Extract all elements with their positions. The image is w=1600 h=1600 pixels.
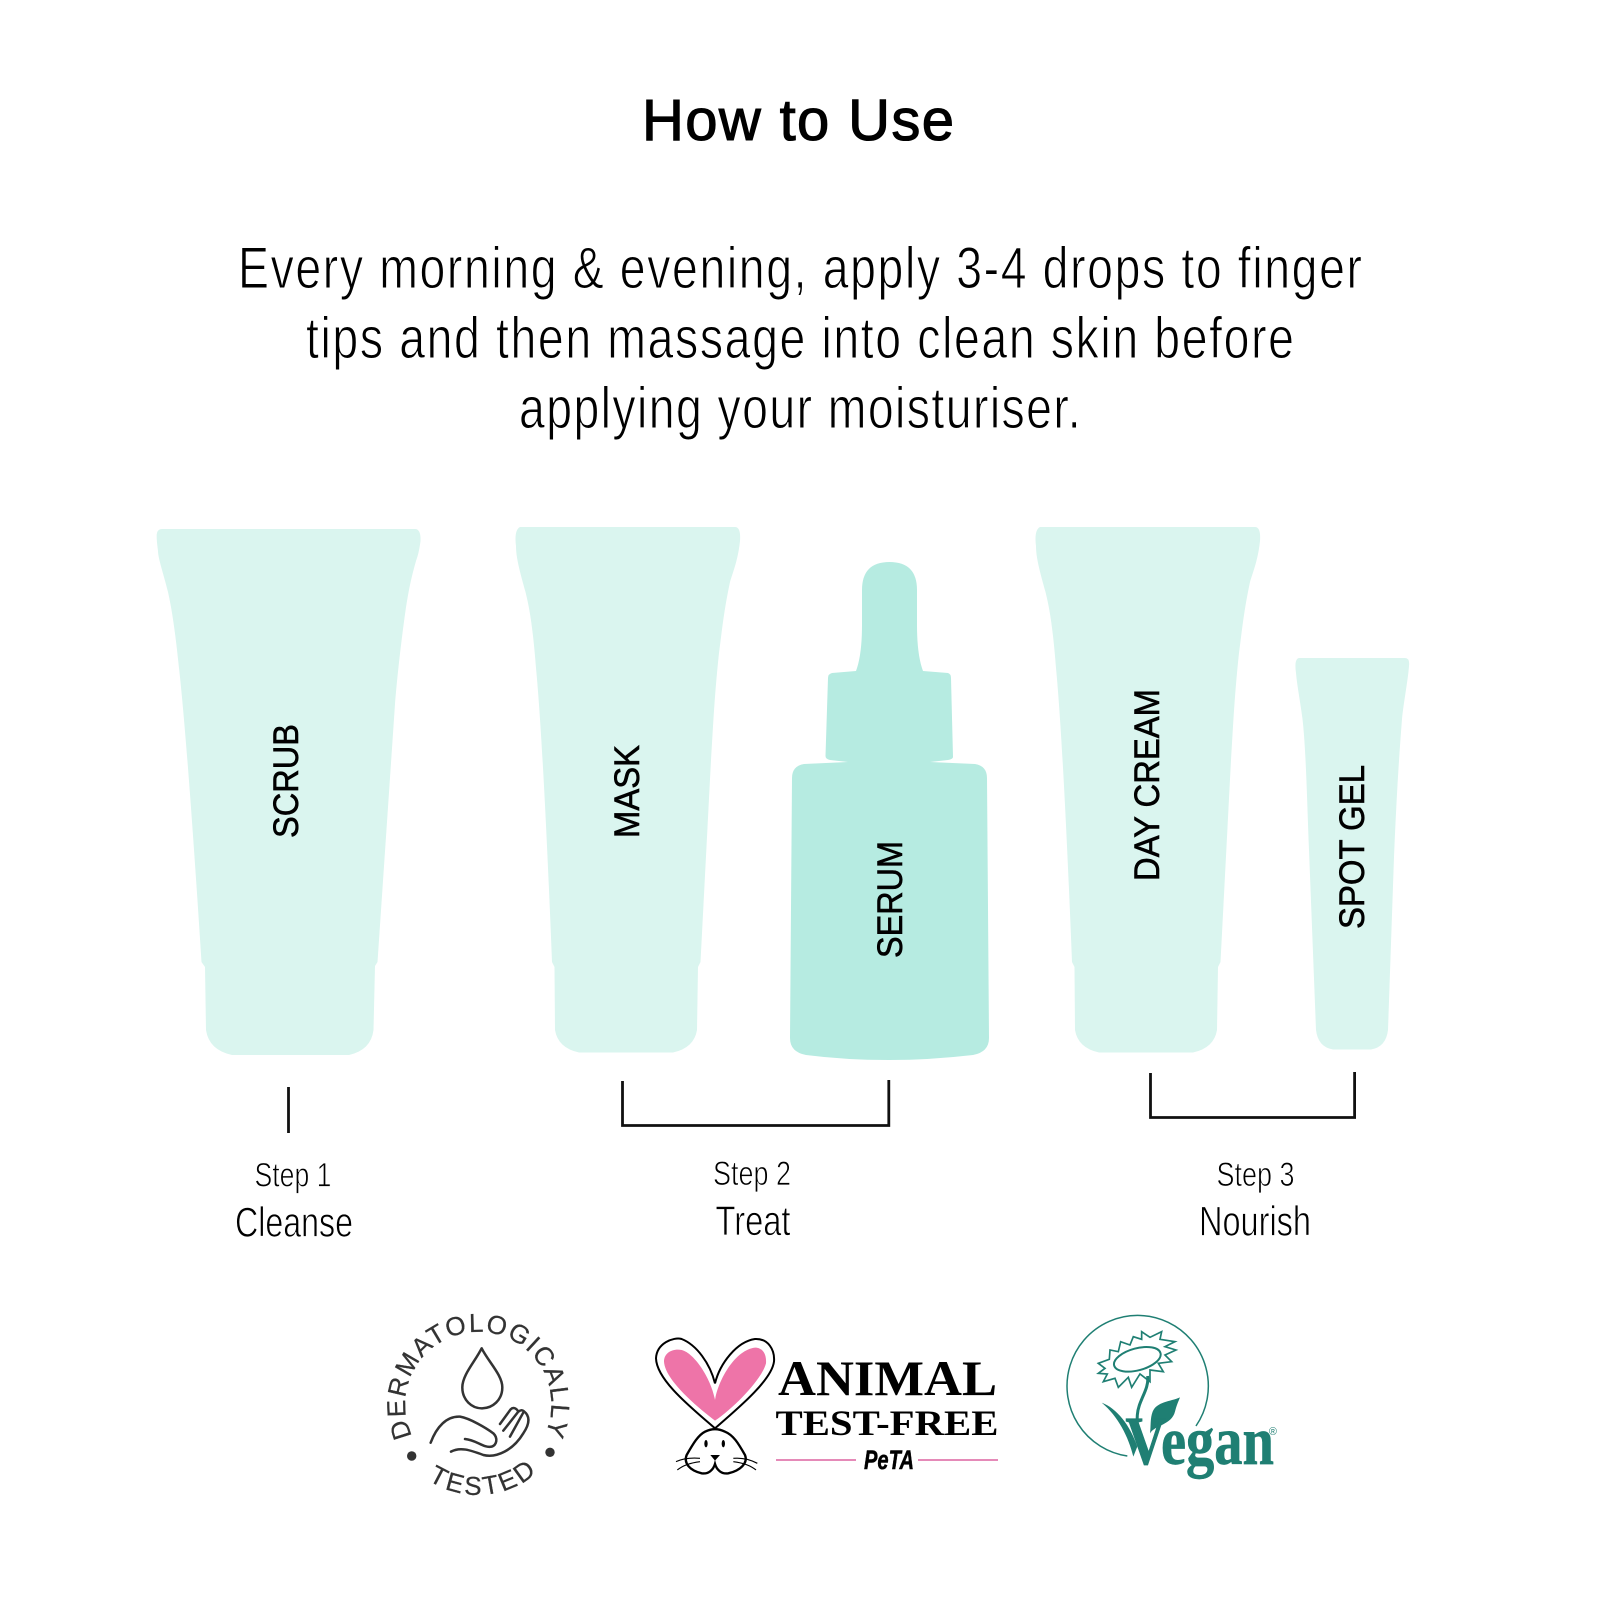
label: scrub: SCRUB: [267, 724, 306, 838]
product: day cream tube: [1036, 527, 1260, 1052]
text: peta: PeTA: [864, 1445, 914, 1475]
step 1 connector: [287, 1087, 290, 1133]
step 3 text: Step 3: [1216, 1156, 1294, 1194]
icon: rabbit heart ears: [656, 1339, 774, 1473]
badge: vegan: ®: [1269, 1426, 1277, 1438]
badge: animal test-free peta: [656, 1339, 998, 1475]
product: spot gel tube: [1295, 658, 1409, 1050]
icon: leaf: [1150, 1397, 1180, 1433]
step 2 text: Treat: [716, 1197, 791, 1244]
step 2 text: Step 2: [713, 1155, 791, 1193]
badge: dermatologically tested: [387, 1314, 570, 1496]
text: vegan: Vegan: [1125, 1403, 1274, 1479]
text: test-free: TEST-FREE: [776, 1403, 998, 1443]
label: mask: MASK: [608, 745, 647, 838]
label: spot gel: SPOT GEL: [1333, 765, 1372, 929]
product: scrub tube: [157, 529, 421, 1055]
title: How to Use: [642, 88, 954, 153]
label: serum: SERUM: [871, 841, 910, 958]
instructions text block: Every morning & evening, apply 3-4 drops to finger: [238, 236, 1362, 301]
text: animal: ANIMAL: [778, 1350, 997, 1406]
instructions text block: applying your moisturiser.: [519, 376, 1081, 441]
step 1 text: [235, 1156, 353, 1246]
step 2 text: [713, 1155, 791, 1244]
product: mask tube: [516, 527, 740, 1052]
step 3 text: Nourish: [1199, 1198, 1311, 1244]
step 2 bracket: [622, 1080, 889, 1126]
instructions text block: tips and then massage into clean skin before: [306, 306, 1294, 371]
step 3 text: [1199, 1156, 1311, 1244]
label: day cream: DAY CREAM: [1128, 689, 1167, 881]
step 3 bracket: [1150, 1072, 1355, 1118]
instructions text block: [238, 236, 1362, 441]
icon: water drop and hand: [431, 1348, 528, 1456]
badge: dermatologically tested: DERMATOLOGICALLY: [387, 1314, 570, 1440]
icon: sunflower: [1098, 1332, 1176, 1443]
step 1 text: Step 1: [254, 1156, 332, 1194]
product: serum dropper bottle: [790, 562, 989, 1060]
badge: dermatologically tested: TESTED: [434, 1462, 532, 1496]
badge: vegan: [1067, 1315, 1277, 1479]
step 1 text: Cleanse: [235, 1198, 353, 1246]
